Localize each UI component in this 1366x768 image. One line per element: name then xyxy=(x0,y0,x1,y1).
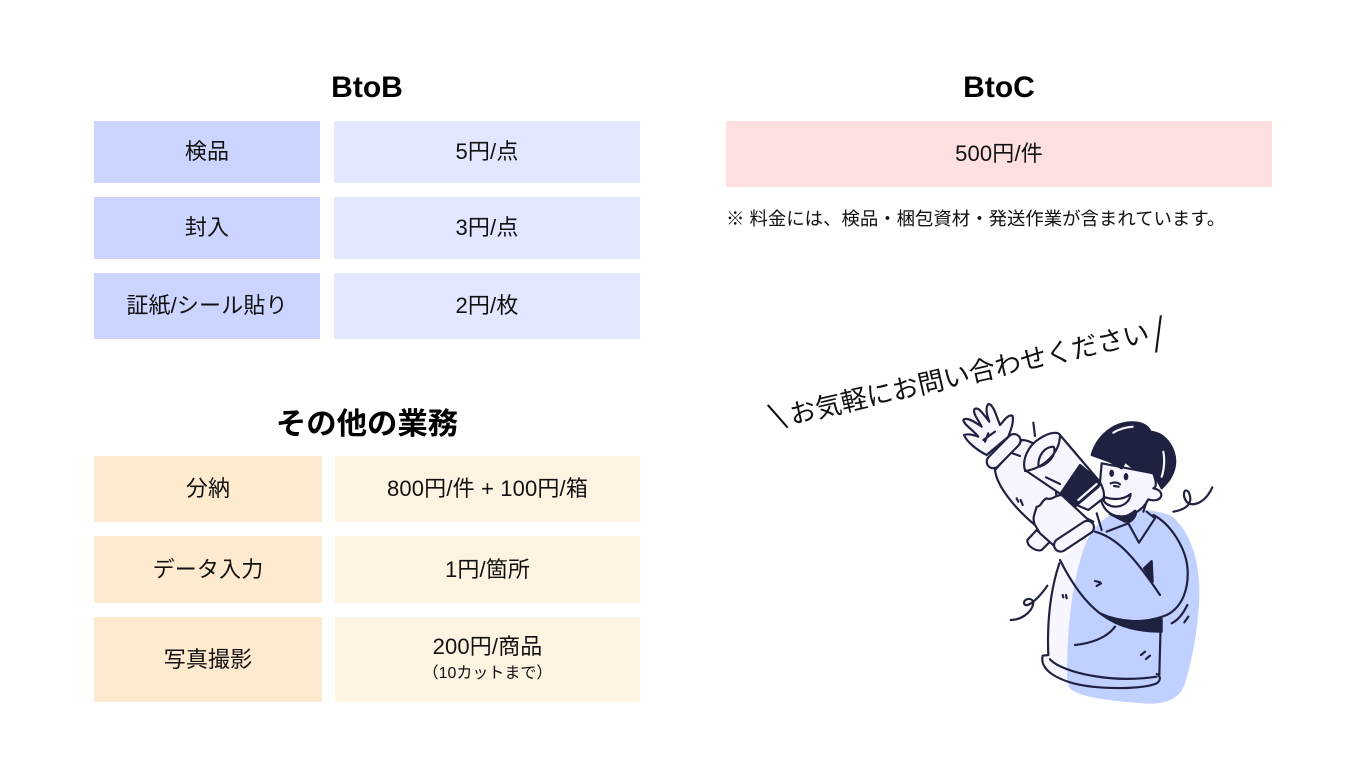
callout: contact message: お気軽にお問い合わせください xyxy=(787,318,1152,430)
panel: BtoC pricing xyxy=(726,71,1272,229)
raised arm sleeve xyxy=(995,440,1057,525)
row value: 1円/箇所 xyxy=(335,536,640,603)
row label: 封入: 封入 xyxy=(185,215,229,240)
row label: 証紙/シール貼り xyxy=(94,273,320,339)
row value: 5円/点 xyxy=(334,121,640,183)
callout: contact message: \ xyxy=(764,396,794,439)
background blob xyxy=(1067,510,1199,704)
megaphone cone xyxy=(1024,433,1104,510)
note: pricing inclusions: ※ 料金には、検品・梱包資材・発送作業が含まれています。 xyxy=(726,208,1225,229)
megaphone band highlight xyxy=(1078,484,1097,500)
torso outline xyxy=(1042,563,1161,688)
squiggle left xyxy=(1011,586,1047,620)
price row: 500円/件: 500円/件 xyxy=(955,141,1043,166)
heading: その他の業務: その他の業務 xyxy=(276,407,458,441)
row value: 2円/枚 xyxy=(334,273,640,339)
neck shadow xyxy=(1110,511,1136,522)
body base fill xyxy=(1043,530,1107,683)
hand cuff xyxy=(993,441,1014,462)
row value: 200円/商品 (10カットまで) xyxy=(335,617,640,702)
face xyxy=(1099,463,1161,516)
hair highlights xyxy=(1113,427,1164,477)
open mouth xyxy=(1103,494,1131,507)
row label: 検品 xyxy=(94,121,320,183)
price row: 500円/件 xyxy=(726,121,1272,187)
fist xyxy=(1034,495,1093,547)
row value: 800円/件 + 100円/箱: 800円/件 + 100円/箱 xyxy=(387,476,588,501)
heading: BtoC: BtoC xyxy=(963,71,1035,104)
row label: データ入力 xyxy=(94,536,322,603)
motion marks xyxy=(1013,423,1188,659)
row label: 封入 xyxy=(94,197,320,259)
row label: 検品: 検品 xyxy=(185,139,229,164)
arm shadow xyxy=(1100,613,1162,632)
row value: 3円/点 xyxy=(334,197,640,259)
squiggle right xyxy=(1173,487,1212,512)
palm marks xyxy=(983,432,995,442)
row label: 分納: 分納 xyxy=(186,476,230,501)
callout: contact message: / xyxy=(1154,306,1163,363)
row value: 200円/商品 (10カットまで): （10カットまで） xyxy=(423,664,552,682)
folded arm xyxy=(1060,515,1188,621)
nose xyxy=(1111,482,1120,487)
heading: BtoB: BtoB xyxy=(331,71,403,104)
row label: 写真撮影 xyxy=(94,617,322,702)
row label: 証紙/シール貼り: 証紙/シール貼り xyxy=(126,293,288,318)
panel: other services pricing xyxy=(94,407,640,702)
illustration: person with megaphone xyxy=(962,402,1214,704)
megaphone handle xyxy=(1027,530,1050,550)
eyes xyxy=(1109,470,1128,480)
row label: データ入力: データ入力 xyxy=(153,556,263,582)
megaphone opening xyxy=(1025,435,1060,484)
row label: 分納 xyxy=(94,456,322,522)
hair xyxy=(1092,422,1175,488)
panel: BtoB pricing xyxy=(94,71,640,339)
row value: 5円/点: 5円/点 xyxy=(456,139,518,164)
fist cuff xyxy=(1061,527,1087,545)
row value: 1円/箇所: 1円/箇所 xyxy=(445,556,530,582)
row label: 写真撮影: 写真撮影 xyxy=(164,646,252,672)
neck and collar xyxy=(1097,502,1155,543)
row value: 800円/件 + 100円/箱 xyxy=(335,456,640,522)
shirt pocket shadow xyxy=(1144,561,1153,582)
raised hand xyxy=(963,404,1013,455)
megaphone dark band xyxy=(1061,465,1100,507)
row value: 2円/枚: 2円/枚 xyxy=(456,293,518,318)
row value: 200円/商品 (10カットまで): 200円/商品 xyxy=(433,634,542,658)
row value: 3円/点: 3円/点 xyxy=(456,215,518,240)
